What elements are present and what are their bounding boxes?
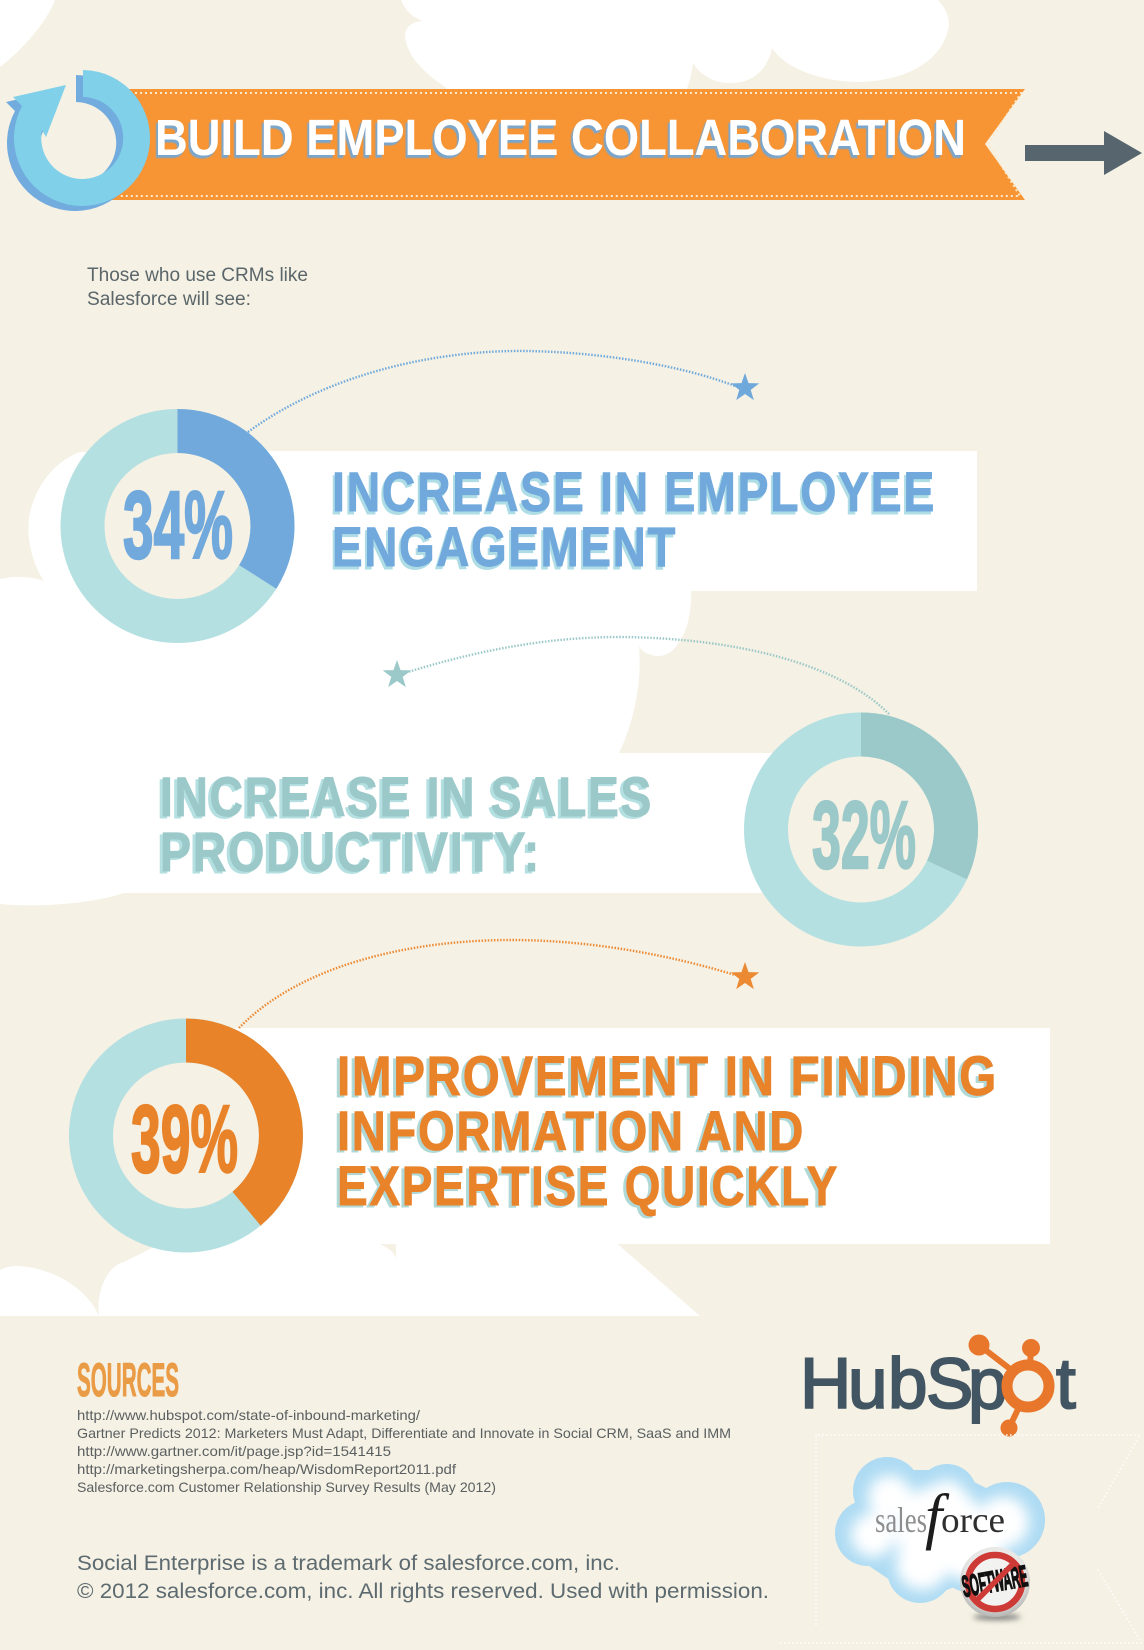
icon: star xyxy=(731,373,759,400)
donut chart xyxy=(91,1018,303,1230)
sources list: Gartner Predicts 2012: Marketers Must Adapt, Differentiate and Innovate in Social CRM, SaaS and IMM xyxy=(77,1425,731,1441)
arrow: right xyxy=(1025,131,1142,175)
cloud: top left xyxy=(0,0,55,67)
sources list: http://www.gartner.com/it/page.jsp?id=1541415 xyxy=(77,1443,391,1459)
sources list xyxy=(77,1407,731,1495)
heading: INCREASE IN SALES xyxy=(160,765,653,828)
heading xyxy=(160,765,653,883)
intro text: Salesforce will see: xyxy=(87,289,251,310)
heading: PRODUCTIVITY: xyxy=(160,820,541,883)
heading: INFORMATION AND xyxy=(337,1099,805,1162)
icon: star xyxy=(731,962,759,989)
wordmark: orce xyxy=(941,1500,1005,1540)
ribbon stitching xyxy=(120,93,1021,196)
ribbon xyxy=(100,89,1025,200)
logo: HubSpot: HubSpot xyxy=(800,1345,1076,1424)
trademark notice: Social Enterprise is a trademark of salesforce.com, inc. xyxy=(77,1552,620,1575)
sources list: Salesforce.com Customer Relationship Survey Results (May 2012) xyxy=(77,1479,496,1495)
heading: INCREASE IN EMPLOYEE xyxy=(332,460,936,523)
cloud shape xyxy=(835,1457,1045,1603)
dotted arc xyxy=(408,637,889,714)
intro text: Those who use CRMs like xyxy=(87,265,308,286)
panel: 32% sales productivity xyxy=(100,637,978,924)
sources list: http://marketingsherpa.com/heap/WisdomReport2011.pdf xyxy=(77,1461,456,1477)
intro text xyxy=(87,265,308,310)
cloud: middle xyxy=(0,452,691,905)
ribbon outline behind salesforce logo xyxy=(780,1435,1144,1643)
heading xyxy=(332,460,936,578)
trademark notice xyxy=(77,1552,769,1603)
title banner xyxy=(100,89,1025,200)
percentage: 32% xyxy=(812,782,916,889)
heading: IMPROVEMENT IN FINDING xyxy=(337,1044,998,1107)
wordmark: f xyxy=(925,1483,950,1551)
trademark notice: © 2012 salesforce.com, inc. All rights reserved. Used with permission. xyxy=(77,1580,769,1603)
heading: EXPERTISE QUICKLY xyxy=(337,1154,839,1217)
dotted arc xyxy=(239,940,735,1028)
icon: sprocket xyxy=(968,1334,1049,1436)
donut chart xyxy=(766,712,978,924)
panel: 39% finding information xyxy=(91,940,1050,1244)
percentage: 34% xyxy=(123,472,233,579)
donut chart xyxy=(82,409,295,621)
wordmark: sales xyxy=(875,1500,927,1540)
icon: star xyxy=(383,660,411,687)
sources list: http://www.hubspot.com/state-of-inbound-marketing/ xyxy=(77,1407,420,1423)
percentage: 39% xyxy=(131,1086,238,1193)
heading: ENGAGEMENT xyxy=(332,515,677,578)
heading xyxy=(337,1044,998,1217)
cloud: bottom xyxy=(0,1240,700,1316)
white box xyxy=(100,753,861,893)
badge: no software xyxy=(959,1547,1030,1620)
white box xyxy=(180,451,977,591)
cloud: top centre xyxy=(401,0,949,92)
text: SOURCES xyxy=(77,1353,179,1406)
text: SOFTWARE xyxy=(959,1560,1030,1604)
dotted arc xyxy=(248,351,735,432)
title text: BUILD EMPLOYEE COLLABORATION xyxy=(155,109,966,166)
icon: circular arrow xyxy=(6,70,150,211)
cloud glow xyxy=(851,1475,1029,1590)
white box xyxy=(190,1028,1050,1244)
wordmark xyxy=(875,1483,1005,1551)
logo: salesforce xyxy=(835,1457,1045,1620)
panel: 34% employee engagement xyxy=(82,351,977,621)
